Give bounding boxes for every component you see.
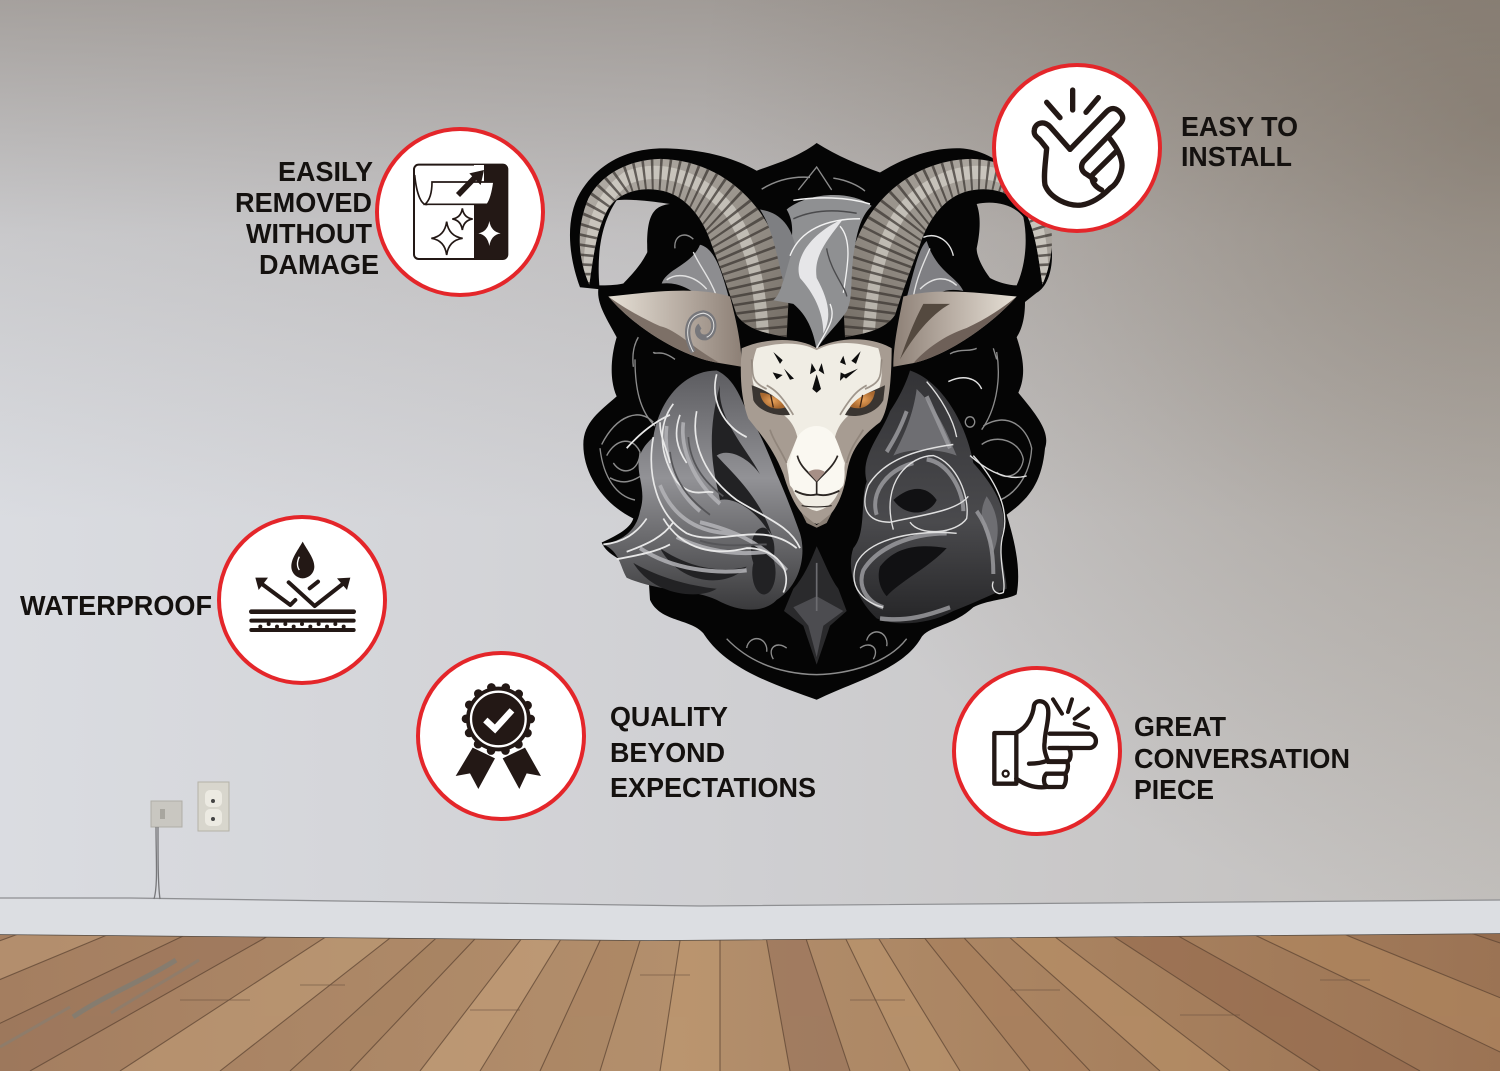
central forelock [760,195,872,350]
nose and mouth [795,456,839,507]
ornamental line work [600,167,1032,675]
feature: waterproof [20,517,385,683]
label: GREAT [1134,711,1226,742]
circle badge [377,129,543,295]
label: INSTALL [1181,141,1292,172]
icon: peeling sticker [414,164,508,259]
circle badge [994,65,1160,231]
chest emblem [784,546,847,665]
label: PIECE [1134,774,1214,805]
right mane [851,370,1027,623]
feature: quality beyond expectations [418,653,816,819]
right horn [843,159,1052,341]
baseboard [0,898,1500,942]
icon: finger snap [1034,90,1123,205]
left mane [603,370,802,610]
circle badge [418,653,584,819]
goat face [741,339,892,528]
label [1181,111,1298,172]
label: DAMAGE [259,249,379,280]
left horn [580,159,788,341]
label: CONVERSATION [1134,743,1350,774]
label: EASY TO [1181,111,1298,142]
label [610,701,816,803]
goat head wall decal [570,143,1052,700]
ears [608,291,1017,367]
feature: easy to install [994,65,1298,231]
feature: great conversation piece [954,668,1350,834]
label: REMOVED [235,187,372,218]
eyes [752,385,885,416]
icon: hand pointing with spark [994,699,1096,787]
label: BEYOND [610,737,725,768]
wall outlet and switch box [151,782,229,899]
decal black silhouette [570,143,1052,700]
label: WATERPROOF [20,590,212,621]
label [235,156,379,280]
circle badge [954,668,1120,834]
feature: easily removed [235,129,543,295]
label: EASILY [278,156,373,187]
icon: water drop repelled by layers [251,542,354,630]
circle badge [219,517,385,683]
label: QUALITY [610,701,728,732]
forehead markings [773,351,861,393]
upper hair tufts beside horns [662,236,963,308]
label [1134,711,1350,805]
label: EXPECTATIONS [610,772,816,803]
label: WITHOUT [246,218,372,249]
icon: rosette with check [456,687,541,789]
wooden floor [0,934,1500,1071]
face shading lines [752,359,882,463]
